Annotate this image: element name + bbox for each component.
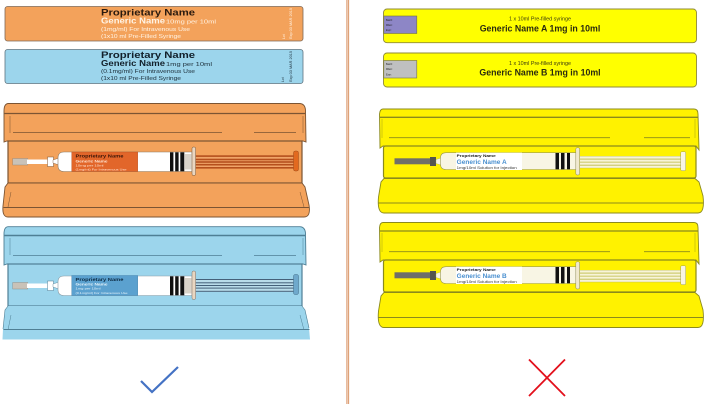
colour block: grey: Mfact:: [386, 68, 393, 71]
panel: orange label: Proprietary Name: [101, 7, 195, 18]
center divider: [346, 0, 349, 404]
panel: orange label: Exp 03 MAR 2015: [289, 8, 293, 39]
syringe: yellow B: [394, 262, 686, 289]
panel: orange label: (1mg/ml) For Intravenous Use: [101, 27, 190, 33]
panel: blue label: (1x10 ml Pre-Filled Syringe: [101, 76, 181, 82]
colour block: grey: Batch:: [386, 63, 393, 66]
syringe label: A: Proprietary Name: [457, 153, 497, 158]
syringe label: orange: Proprietary Name: [76, 154, 124, 159]
icon: blue check mark: [141, 367, 178, 392]
panel: blue label: Proprietary Name: [101, 49, 195, 60]
syringe label: B: [456, 267, 522, 284]
panel: orange label: Generic Name: [101, 17, 166, 26]
syringe label: blue: [72, 276, 138, 296]
panel: yellow label B: 1 x 10ml Pre-filled syringe: [509, 61, 571, 67]
panel: yellow label A: [384, 9, 696, 43]
panel: blue label: Lot: [281, 77, 285, 82]
colour block: purple: Batch:: [386, 19, 393, 22]
syringe: yellow A: [394, 148, 686, 175]
panel: blue label: [5, 49, 303, 84]
syringe label: blue: Generic Name: [76, 282, 108, 286]
syringe label: B: Proprietary Name: [457, 267, 497, 272]
panel: yellow label B: [384, 53, 696, 87]
syringe label: B: 1mg/10ml Solution for Injection: [457, 280, 517, 284]
panel: orange label: 10mg per 10ml: [166, 20, 216, 26]
panel: yellow label A: Generic Name A 1mg in 10ml: [480, 24, 600, 34]
syringe label: orange: Generic Name: [76, 159, 108, 163]
panel: blue label: 1mg per 10ml: [166, 62, 212, 68]
colour block: purple: Expr:: [386, 29, 392, 32]
syringe label: A: Generic Name A: [457, 160, 507, 166]
syringe label: orange: [72, 152, 138, 172]
panel: blue label: (0.1mg/ml) For Intravenous Use: [101, 69, 195, 75]
panel: yellow tray B: [378, 222, 704, 328]
panel: orange label: (1x10 ml Pre-Filled Syringe: [101, 34, 181, 40]
syringe label: A: [456, 153, 522, 170]
panel: blue tray: [2, 227, 310, 340]
syringe label: blue: (0.1mg/ml) For Intravenous Use: [76, 291, 128, 295]
panel: orange label: [5, 6, 303, 41]
colour block: grey: Expr:: [386, 74, 392, 76]
panel: yellow label B: Generic Name B 1mg in 10ml: [479, 68, 601, 78]
panel: orange tray: [3, 104, 309, 217]
panel: blue label: Exp 03 MAR 2015: [289, 51, 293, 82]
syringe label: blue: Proprietary Name: [76, 277, 124, 282]
panel: orange label: Lot: [282, 34, 286, 39]
colour block: purple: Mfact:: [386, 24, 393, 27]
panel: yellow label A: 1 x 10ml Pre-filled syringe: [509, 16, 571, 22]
syringe label: B: Generic Name B: [457, 274, 507, 280]
syringe label: blue: 1mg per 10ml: [76, 287, 101, 291]
colour block: purple: [384, 16, 417, 34]
syringe: orange: [13, 147, 298, 176]
colour block: grey: [384, 60, 417, 78]
syringe label: A: 1mg/10ml Solution for Injection: [457, 166, 517, 170]
panel: blue label: Generic Name: [101, 59, 166, 68]
syringe label: orange: (1mg/ml) For Intravenous Use: [76, 167, 127, 171]
panel: yellow tray A: [378, 109, 704, 213]
syringe: blue: [13, 271, 298, 300]
syringe label: orange: 10mg per 10ml: [76, 163, 104, 167]
icon: red cross: [529, 360, 565, 396]
